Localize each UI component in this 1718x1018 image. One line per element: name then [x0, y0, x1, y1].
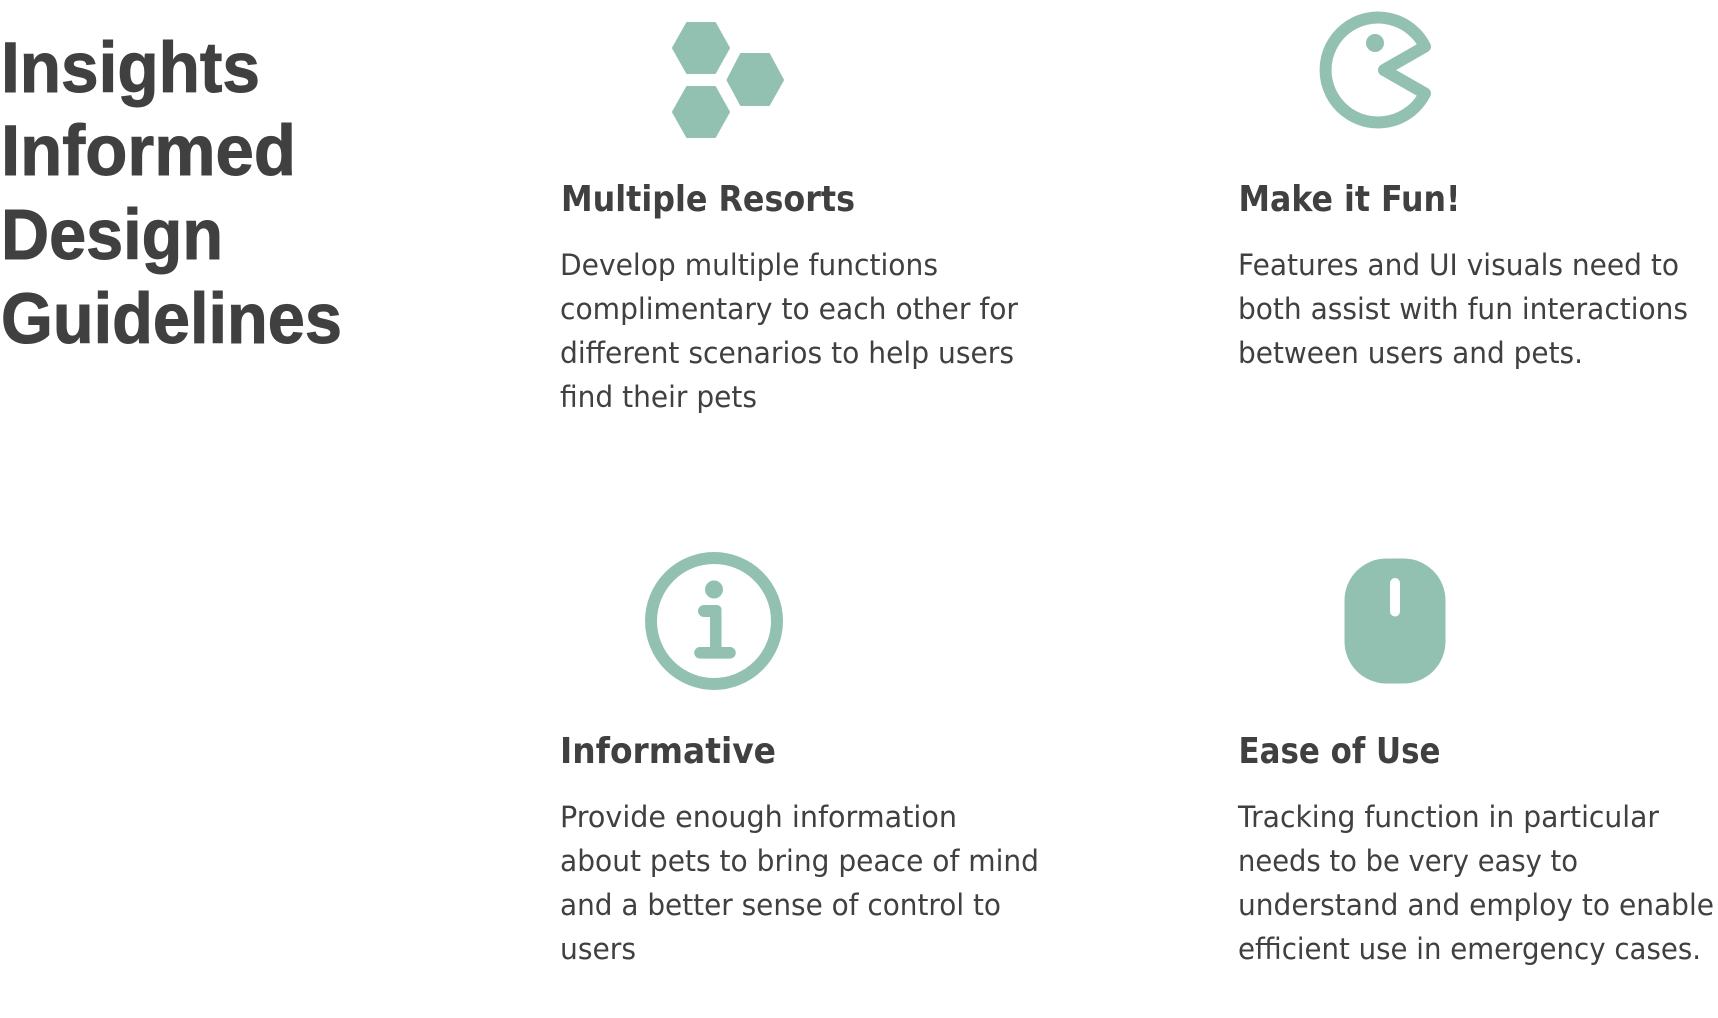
heading: multiple resorts: Multiple Resorts [561, 179, 855, 220]
text: ease of use description: Tracking function in particular [1237, 800, 1659, 834]
text: make it fun description: both assist with fun interactions [1238, 292, 1688, 326]
title: Guidelines [1, 280, 342, 359]
text: ease of use description: needs to be very easy to [1238, 844, 1578, 878]
text: ease of use description [1237, 800, 1714, 966]
text: make it fun description: Features and UI visuals need to [1238, 248, 1679, 282]
text: multiple resorts description: Develop multiple functions [560, 248, 938, 282]
text: multiple resorts description: find their pets [560, 380, 757, 414]
text: informative description: and a better sense of control to [560, 888, 1001, 922]
text: informative description [560, 800, 1039, 966]
heading: ease of use: Ease of Use [1238, 731, 1440, 772]
text: make it fun description: between users and pets. [1238, 336, 1583, 370]
text: informative description: about pets to bring peace of mind [560, 844, 1039, 878]
text: informative description: Provide enough information [560, 800, 957, 834]
panel: make it fun [1238, 17, 1688, 370]
title: Design [1, 196, 223, 275]
title [1, 29, 342, 359]
title: Informed [1, 112, 296, 191]
icon: three hexagons [673, 23, 783, 137]
text: multiple resorts description [560, 248, 1018, 414]
title: Insights [1, 29, 260, 108]
text: ease of use description: understand and employ to enable [1238, 888, 1714, 922]
heading: make it fun: Make it Fun! [1238, 179, 1460, 220]
text: ease of use description: efficient use in emergency cases. [1238, 932, 1701, 966]
panel: ease of use [1237, 558, 1714, 966]
text: multiple resorts description: complimentary to each other for [560, 292, 1018, 326]
icon: info circle [651, 558, 777, 684]
text: informative description: users [560, 932, 636, 966]
text: multiple resorts description: different scenarios to help users [560, 336, 1014, 370]
panel: informative [560, 558, 1039, 966]
heading: informative: Informative [560, 731, 776, 772]
panel: multiple resorts [560, 23, 1018, 414]
text: make it fun description [1238, 248, 1688, 370]
icon: pac-man [1326, 17, 1425, 123]
icon: computer mouse [1344, 558, 1446, 684]
